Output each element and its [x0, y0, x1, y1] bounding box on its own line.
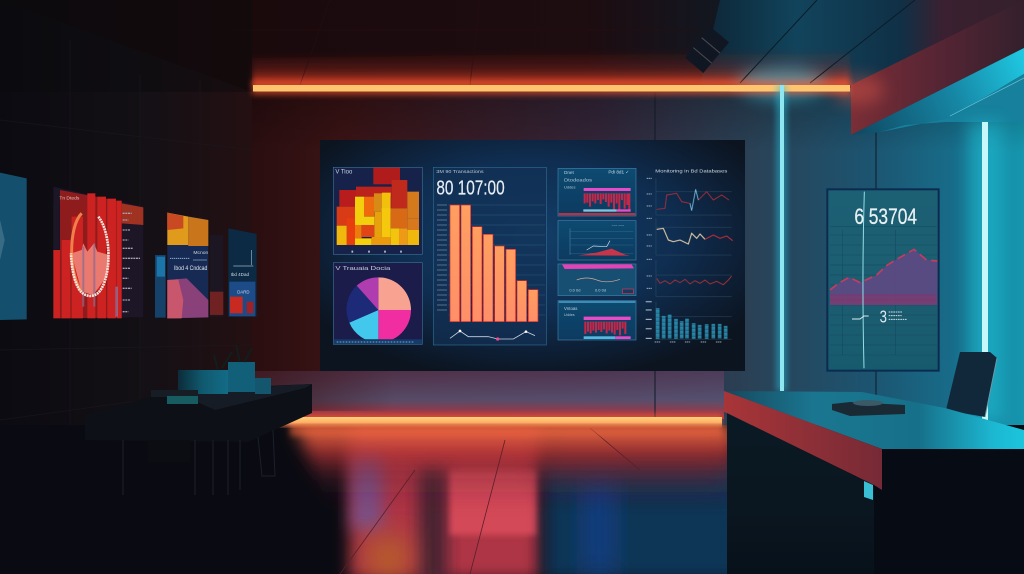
vertical cyan strip	[776, 85, 787, 391]
ceiling	[0, 0, 1024, 135]
heatmap panel	[333, 167, 422, 254]
mini panel 1: Uddes	[564, 185, 576, 190]
mini panel 3: 0.0 0d	[569, 288, 580, 293]
line chart 1	[657, 192, 729, 209]
left wall panel: dark blue	[210, 228, 257, 317]
ceiling projector	[685, 27, 729, 73]
desk items	[832, 400, 905, 416]
area chart	[830, 249, 937, 305]
right cyan light strip	[968, 122, 1002, 422]
mini panel 4: Uddes	[564, 313, 575, 317]
left wall panel: red circular chart: Tn Dteds	[59, 195, 80, 201]
mini panel 3	[558, 264, 636, 296]
left wall	[0, 0, 252, 530]
mini panel 1: Pdi 8d1 ✓	[608, 169, 629, 174]
mini panel 2: ~~~ ~~~	[612, 223, 624, 227]
plant leaves	[214, 345, 252, 370]
bottom neon strip	[278, 414, 722, 436]
desk	[724, 391, 1024, 574]
left wall panel: orange and purple	[155, 213, 209, 318]
bar chart panel	[433, 167, 546, 345]
line chart 2	[657, 228, 705, 244]
table top	[85, 384, 312, 442]
right soffit and cyan beam	[832, 0, 1024, 135]
left wall panel: blue	[0, 173, 27, 320]
bar chart big number: 80 107:00	[436, 178, 505, 200]
floor	[0, 425, 1024, 574]
table legs	[123, 430, 275, 495]
left wall panel: red circular chart	[53, 187, 143, 318]
desk front edge	[724, 391, 882, 490]
planter: left pot	[178, 370, 228, 394]
desk top surface	[724, 391, 1024, 449]
side table with planters	[85, 345, 312, 495]
poster small figure: 3	[880, 306, 887, 326]
mini panel 4	[558, 301, 636, 340]
left wall panel: dark blue: Ibd 4Dad	[231, 272, 249, 278]
heatmap title: V Tioo	[335, 169, 353, 175]
bar chart heading: 3M 90 Transactions	[436, 169, 484, 175]
left wall panel: dark blue: DARD	[237, 289, 250, 294]
right wall poster chart	[827, 189, 939, 371]
mini panel 1	[558, 168, 636, 216]
pie chart title: V Trauaia Docia	[335, 266, 391, 272]
poster big number: 6 53704	[854, 204, 917, 229]
mini panel 2	[558, 221, 636, 260]
left wall panel: orange and purple: Mcnon	[193, 250, 209, 256]
mini panel 1: Dtodeados	[564, 178, 593, 183]
left wall panel: orange and purple: Ibod 4 Cndcad	[174, 266, 207, 272]
line charts column	[646, 169, 733, 342]
mini panel 1: Dnet	[564, 170, 575, 175]
planter: tall pot	[228, 362, 255, 392]
chair	[946, 352, 997, 417]
desk base	[727, 413, 875, 574]
pie chart panel	[333, 263, 422, 344]
back wall	[252, 88, 1024, 433]
mini panels column	[558, 168, 636, 340]
blue bar chart	[658, 308, 726, 339]
books stack	[151, 390, 198, 404]
mini panel 3: 0.0 0d	[595, 288, 606, 293]
planter: small pot	[255, 378, 271, 394]
line charts heading: Monitoring in Bd Databases	[655, 169, 728, 175]
top neon strip	[252, 81, 850, 95]
line chart 3	[657, 276, 732, 285]
main dashboard screen	[320, 140, 745, 371]
mini panel 4: Vntoas	[564, 306, 577, 311]
